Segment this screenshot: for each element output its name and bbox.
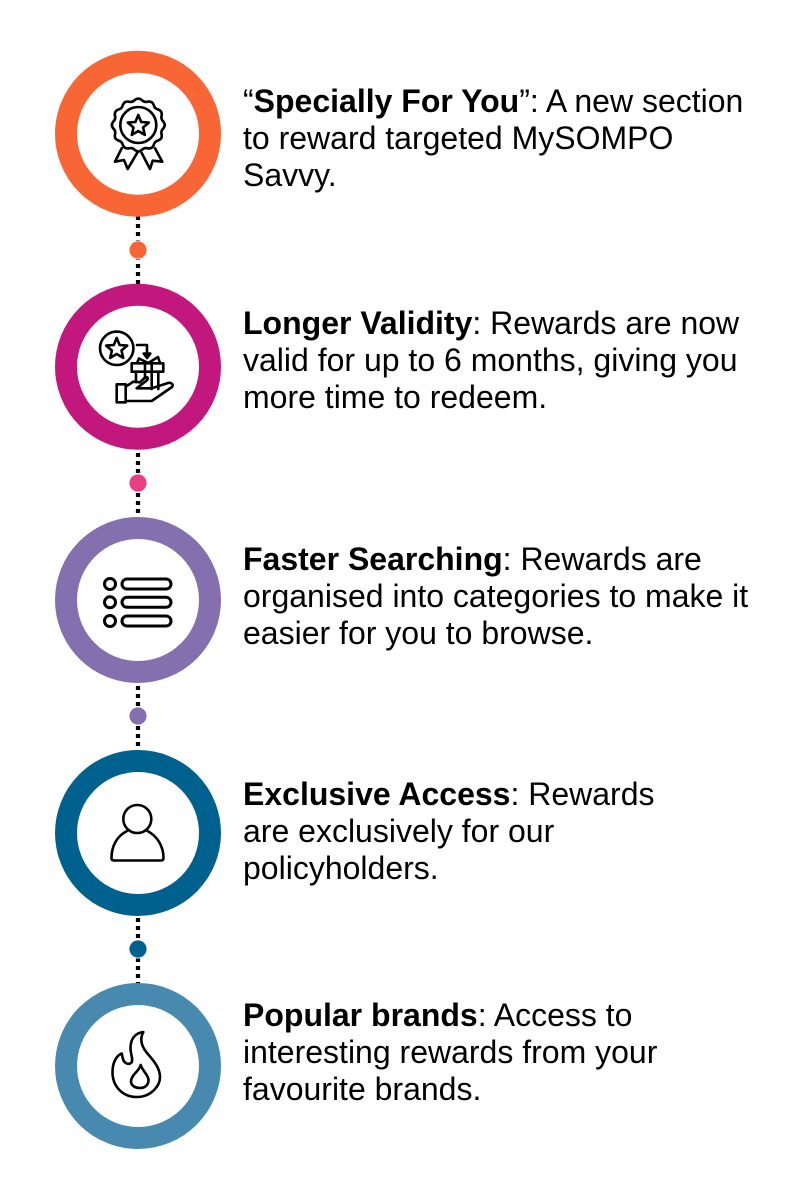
text: Popular brands: interesting rewards from your	[243, 1034, 658, 1070]
step 2: Longer Validity	[66, 295, 740, 439]
text: Faster Searching: organised into categories to make it	[243, 578, 748, 614]
text: Exclusive Access: are exclusively for our	[243, 813, 555, 849]
text: Specially For You: Savvy.	[243, 157, 337, 193]
icon: star and gift on hand	[100, 332, 173, 402]
text: Longer Validity	[243, 305, 740, 415]
text: Popular brands: favourite brands.	[243, 1071, 481, 1107]
text: Longer Validity: Longer Validity: Rewards are now	[243, 305, 740, 341]
ring: orange	[66, 62, 210, 206]
text: Exclusive Access	[243, 776, 654, 886]
step 5: Popular brands	[66, 994, 658, 1138]
text: Specially For You	[243, 83, 743, 193]
icon: person	[112, 805, 164, 860]
connector: step 2 to step 3	[128, 453, 148, 517]
text: Faster Searching: easier for you to browse.	[243, 615, 593, 651]
icon: award rosette	[111, 97, 166, 169]
text: Exclusive Access: policyholders.	[243, 850, 439, 886]
text: Popular brands: Popular brands: Access to	[243, 997, 632, 1033]
text: Exclusive Access: Exclusive Access: Rewards	[243, 776, 654, 812]
text: Longer Validity: valid for up to 6 months, giving you	[243, 342, 738, 378]
text: Popular brands	[243, 997, 658, 1107]
ring: light blue	[66, 994, 210, 1138]
connector: step 4 to step 5	[128, 918, 148, 984]
ring: magenta	[66, 295, 210, 439]
text: Longer Validity: more time to redeem.	[243, 379, 547, 415]
connector: step 3 to step 4	[128, 686, 148, 750]
ring: purple	[66, 528, 210, 672]
text: Specially For You: to reward targeted MySOMPO	[243, 120, 673, 156]
icon: list	[104, 578, 171, 626]
text: Specially For You: “Specially For You”: A new section	[243, 83, 743, 119]
step 4: Exclusive Access	[66, 761, 654, 905]
step 3: Faster Searching	[66, 528, 748, 672]
icon: flame	[112, 1032, 160, 1097]
ring: dark blue	[66, 761, 210, 905]
connector: step 1 to step 2	[128, 216, 148, 284]
text: Faster Searching: Faster Searching: Rewards are	[243, 541, 702, 577]
text: Faster Searching	[243, 541, 748, 651]
step 1: Specially For You	[66, 62, 743, 206]
